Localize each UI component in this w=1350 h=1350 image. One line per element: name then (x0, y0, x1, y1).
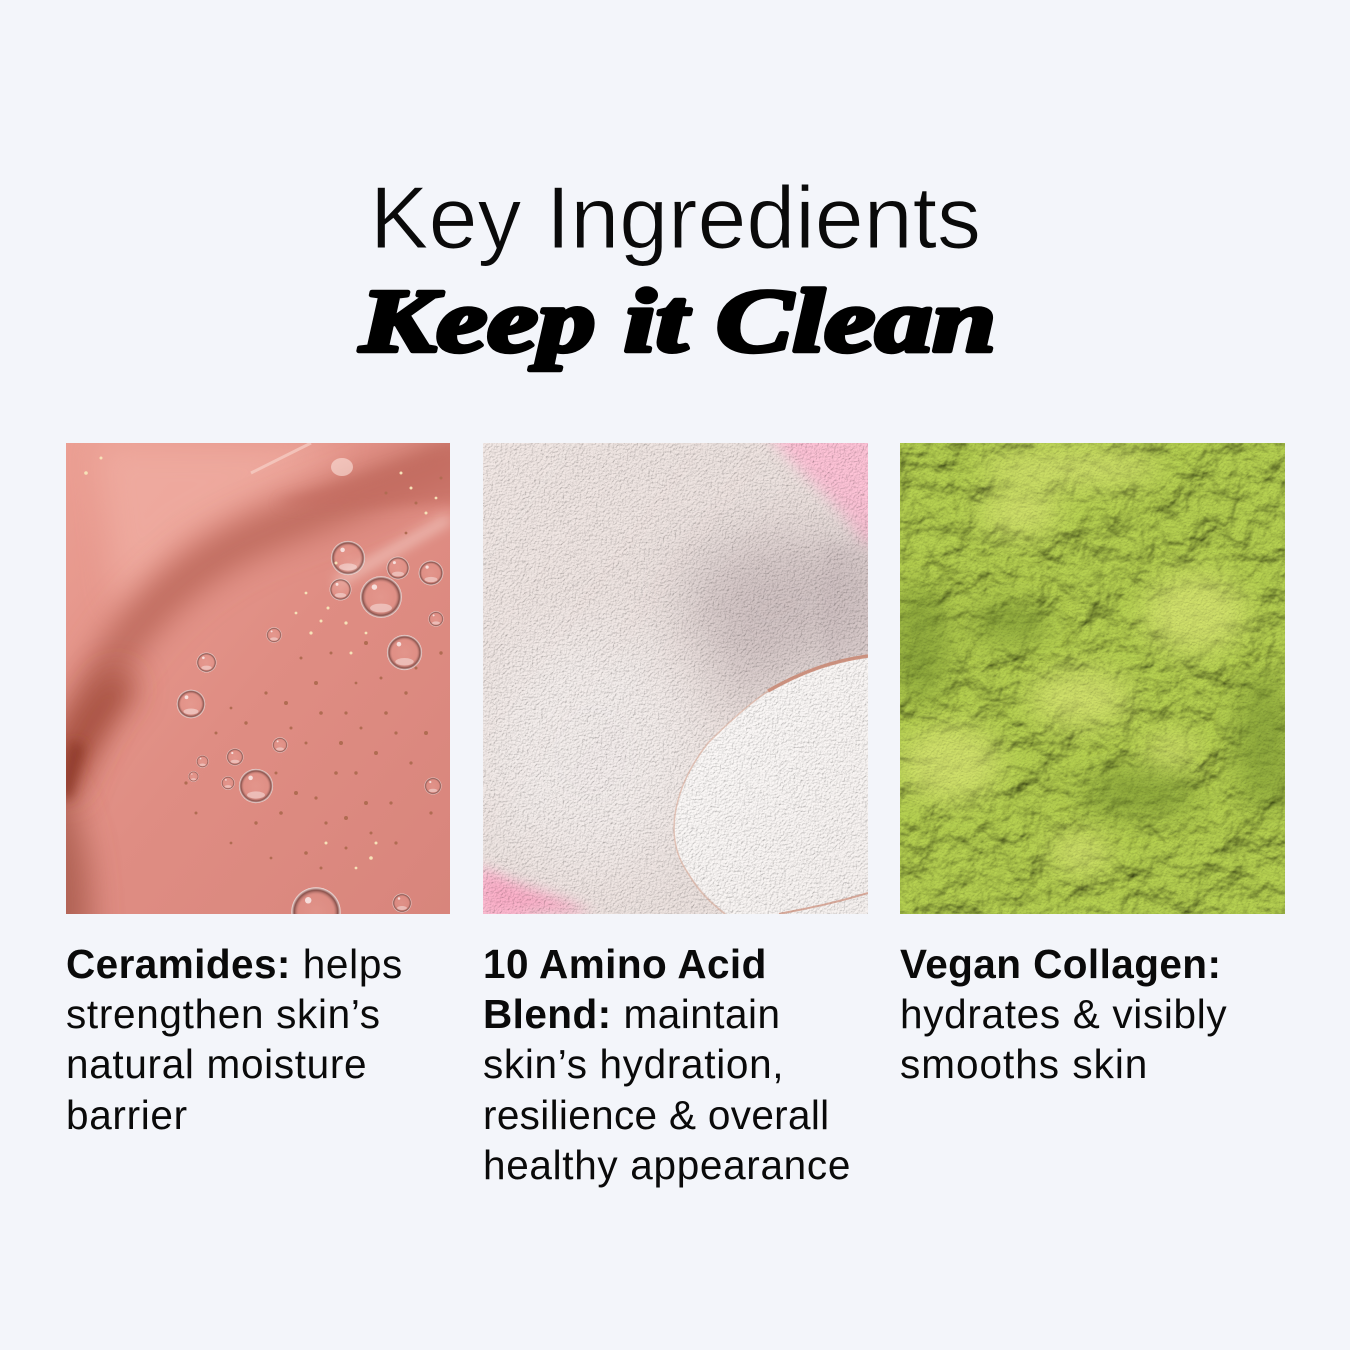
text: vegan collagen: smooths skin (900, 1041, 1148, 1087)
panel: vegan collagen powder photo (900, 443, 1285, 914)
shadow in the powder (683, 537, 883, 713)
text: ceramides (66, 941, 403, 1138)
text: amino acid blend: 10 Amino Acid (483, 941, 767, 987)
text: amino acid blend: healthy appearance (483, 1142, 851, 1188)
text: ceramides: strengthen skin’s (66, 991, 381, 1037)
upper right darker rim (276, 438, 466, 507)
text: ceramides: natural moisture (66, 1041, 367, 1087)
text: ceramides: Ceramides: helps (66, 941, 403, 987)
panel: ceramides photo (66, 443, 450, 914)
text: vegan collagen: hydrates & visibly (900, 991, 1227, 1037)
highlighted clumps (900, 450, 1245, 873)
text: amino acid blend: resilience & overall (483, 1092, 830, 1138)
gold speckles (184, 476, 443, 870)
heading (356, 168, 996, 372)
pink bottom (483, 871, 593, 914)
text: amino acid blend: Blend: maintain (483, 991, 781, 1037)
panel: amino acid powder photo (483, 443, 868, 914)
soft upper light area (96, 443, 356, 613)
dark curved band (56, 453, 466, 793)
subtitle: Keep it Clean: Keep it Clean (359, 272, 996, 371)
spoon powder (674, 656, 868, 914)
shaded crevices (890, 583, 1295, 818)
text: ceramides: barrier (66, 1092, 188, 1138)
spoon rim (768, 656, 868, 691)
title: Key Ingredients: Key Ingredients (370, 168, 981, 267)
text: amino acid blend: skin’s hydration, (483, 1041, 784, 1087)
text: vegan collagen: Vegan Collagen: (900, 941, 1221, 987)
bubbles (177, 541, 444, 937)
text: amino acid blend (483, 941, 851, 1188)
powder mound (443, 403, 859, 963)
text: vegan collagen (900, 941, 1227, 1087)
